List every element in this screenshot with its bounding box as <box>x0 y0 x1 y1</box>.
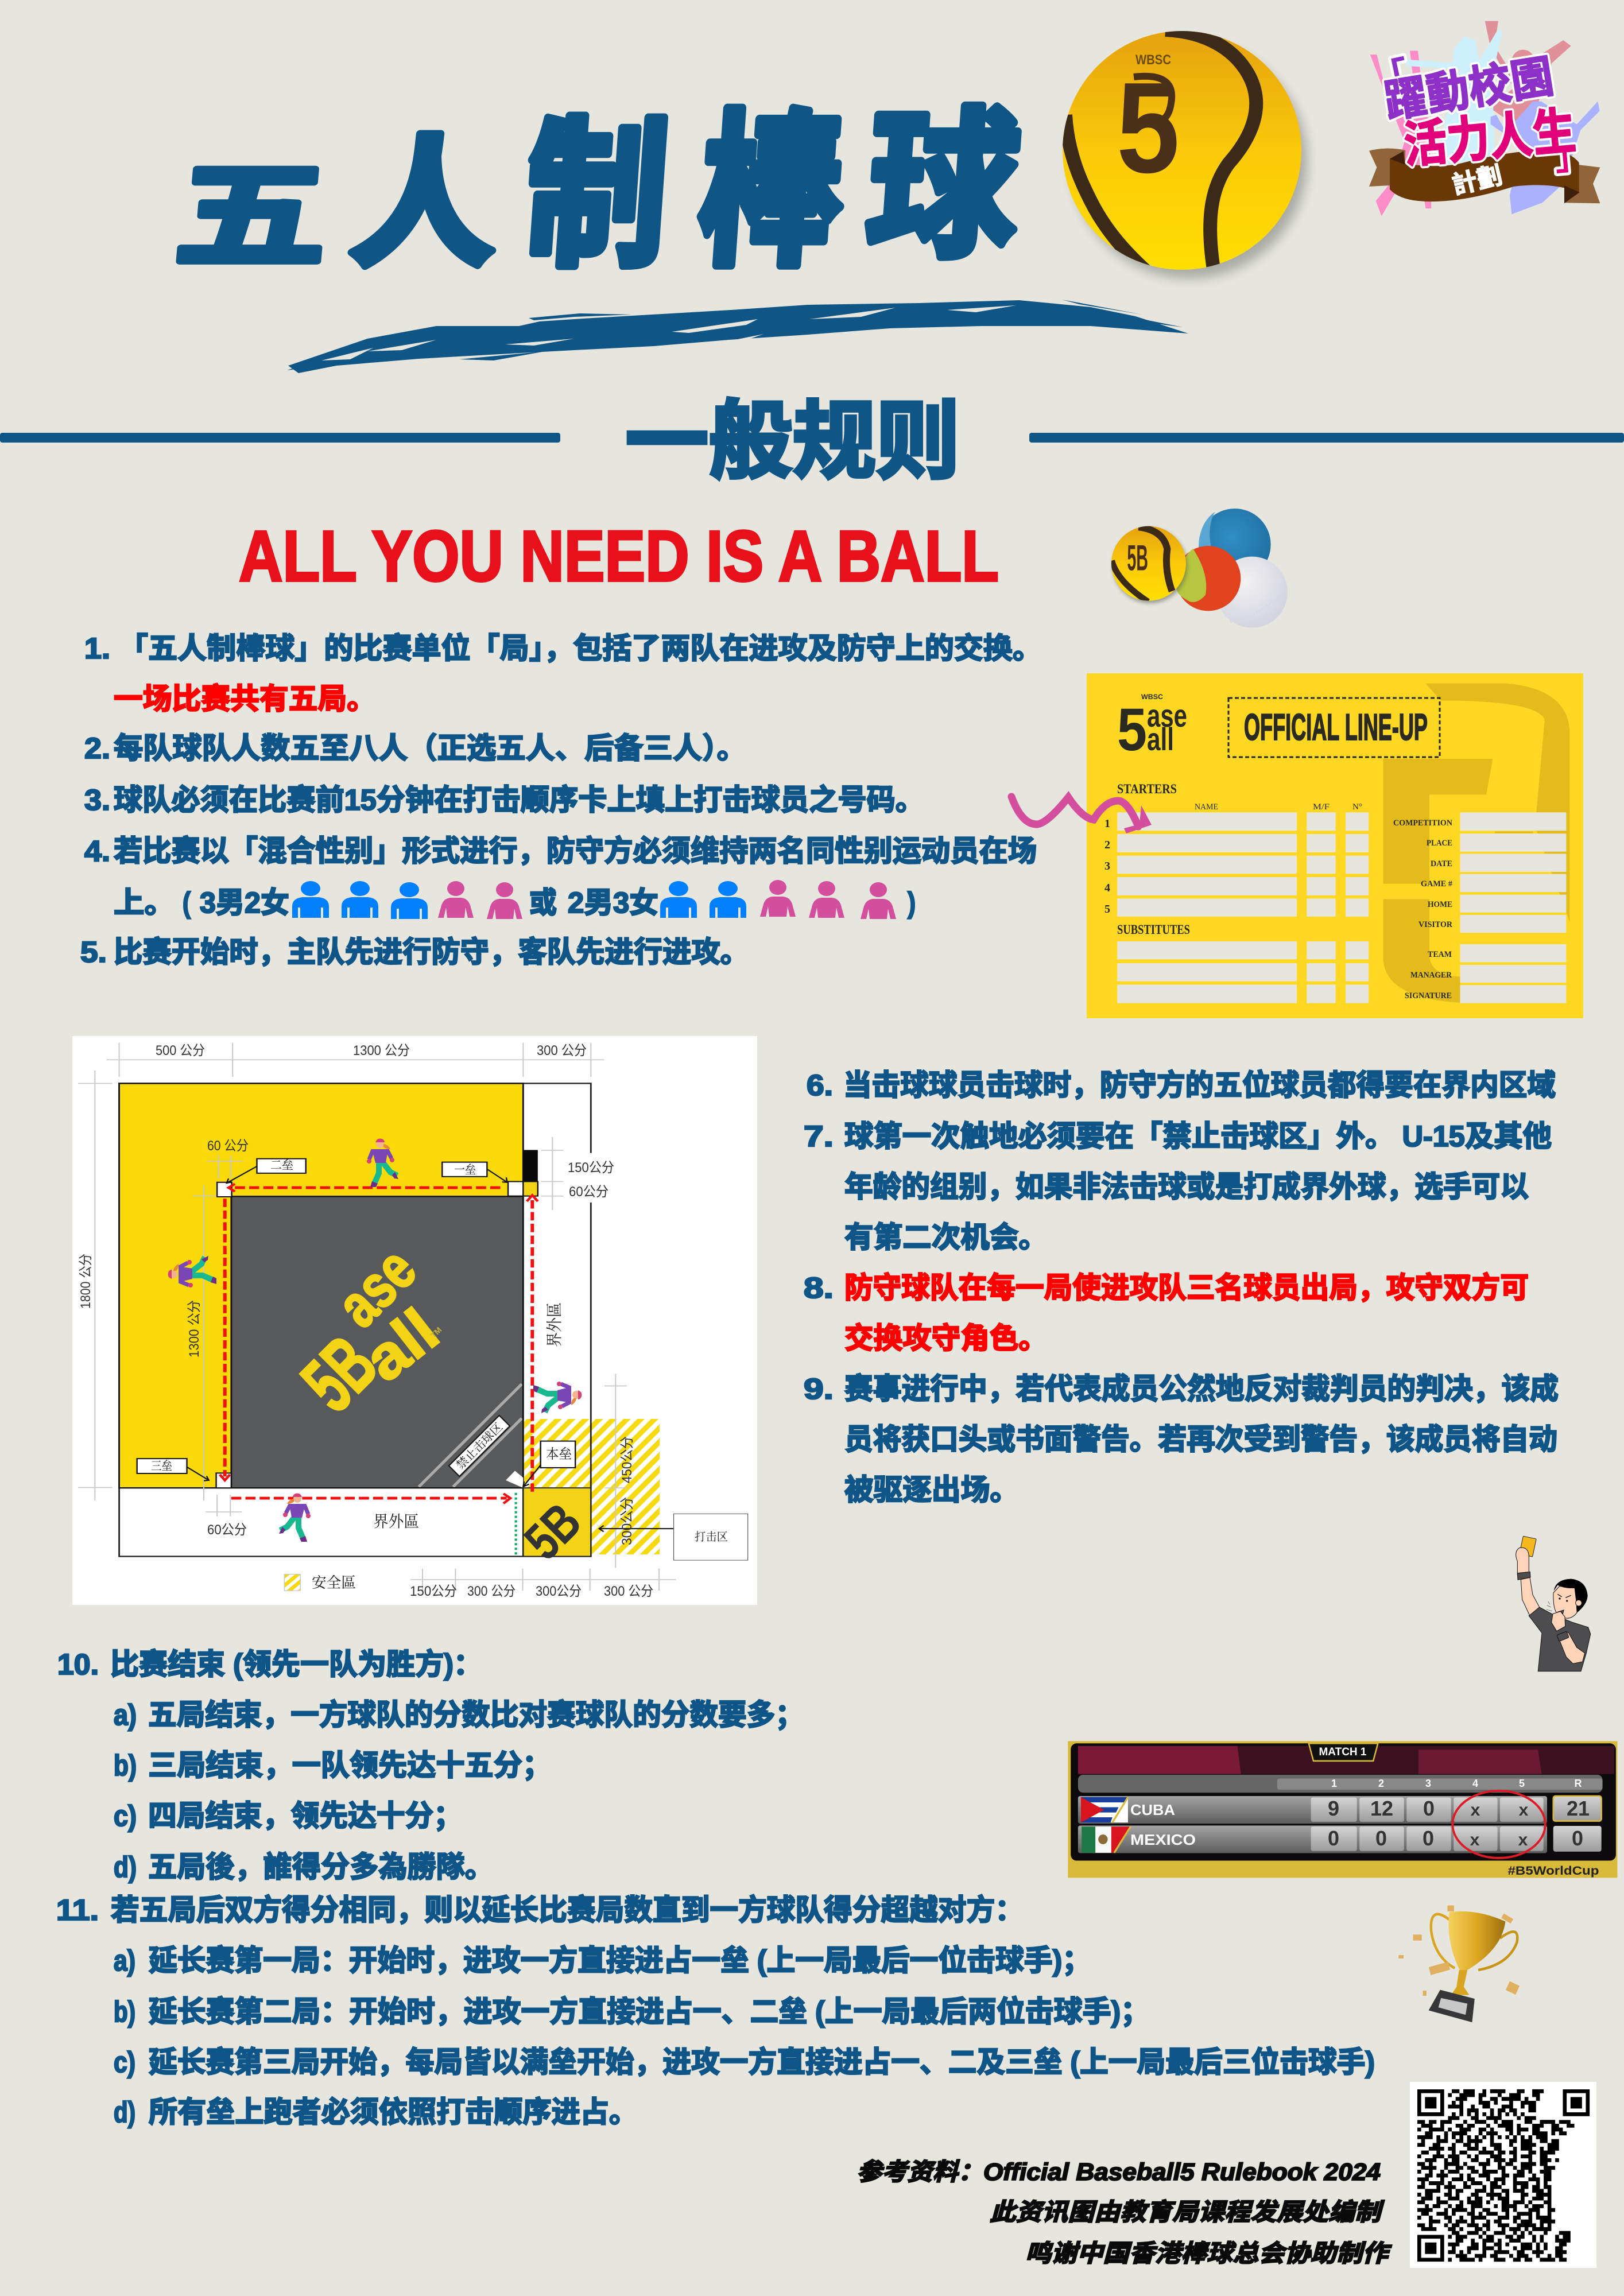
dimension labels: 1300 公分 <box>353 1043 410 1058</box>
section heading: 一般规则 <box>0 393 1624 490</box>
rule 11: 所有垒上跑者必须依照打击顺序进占。 <box>149 2096 638 2128</box>
scoreboard text: 0 <box>1423 1797 1435 1820</box>
panel: court diagram <box>72 1036 757 1605</box>
rule 10: 比赛结束 (领先一队为胜方)： <box>110 1648 482 1681</box>
no-hit zone label: 禁止击球区 <box>454 1420 505 1472</box>
scoreboard text: x <box>1519 1801 1529 1820</box>
rules 1 to 5: ) <box>908 886 916 919</box>
zone labels: 界外區 <box>373 1512 419 1531</box>
dimension labels: 300公分 <box>619 1497 635 1545</box>
rules 1 to 5: 1. <box>84 632 110 665</box>
panel: scoreboard photo <box>1068 1741 1617 1878</box>
rules 6 to 9: 赛事进行中，若代表成员公然地反对裁判员的判决，该成 <box>844 1372 1559 1405</box>
scoreboard text: x <box>1470 1830 1480 1849</box>
rule 10: b) <box>114 1749 137 1782</box>
rules 1 to 5: 上。 <box>114 886 175 919</box>
BaseBall5 court logo <box>285 1234 451 1428</box>
card logo: WBSC <box>1141 693 1163 701</box>
card logo: all <box>1147 721 1174 757</box>
rule 11: c) <box>114 2046 135 2078</box>
title: 人 <box>344 126 506 284</box>
rules 6 to 9: 当击球球员击球时，防守方的五位球员都得要在界内区域 <box>843 1069 1556 1102</box>
zone labels: 打击区 <box>695 1530 728 1543</box>
references / credits: 此资讯图由教育局课程发展处编制 <box>990 2198 1385 2225</box>
zone labels: 界外區 <box>545 1302 564 1347</box>
dimension labels: 60公分 <box>207 1522 247 1538</box>
flag: Mexico <box>1082 1826 1130 1853</box>
card labels: COMPETITION <box>1393 819 1452 828</box>
icon: four balls <box>1111 509 1288 628</box>
card labels <box>1104 782 1452 1000</box>
icon: main baseball5 ball <box>1063 30 1307 278</box>
scoreboard text: CUBA <box>1130 1801 1175 1818</box>
references / credits: 鸣谢中国香港棒球总会协助制作 <box>1025 2240 1393 2267</box>
rules 1 to 5: 3男2女 <box>200 886 289 919</box>
scoreboard text: MEXICO <box>1130 1831 1196 1848</box>
zone labels <box>151 1158 728 1591</box>
card labels: 2 <box>1104 839 1110 851</box>
rules 1 to 5: 若比赛以「混合性别」形式进行，防守方必须维持两名同性别运动员在场 <box>114 835 1037 867</box>
logo heading: 「 <box>1367 55 1413 104</box>
card labels: SUBSTITUTES <box>1117 922 1190 937</box>
scoreboard text: 12 <box>1370 1797 1393 1820</box>
scoreboard text: R <box>1574 1778 1582 1789</box>
rule 10 <box>57 1648 804 1883</box>
rules 6 to 9 <box>804 1069 1559 1506</box>
dimension labels: 60公分 <box>569 1184 608 1200</box>
scoreboard text: 2 <box>1378 1778 1384 1789</box>
ribbon <box>1369 149 1600 203</box>
dimension labels: 300 公分 <box>467 1584 516 1599</box>
rules 6 to 9: 8. <box>804 1271 834 1304</box>
rule 11: 11. <box>56 1894 99 1926</box>
rules 1 to 5: 一场比赛共有五局。 <box>114 682 376 715</box>
logo heading: 活力人生 <box>1402 103 1578 173</box>
rule 11: 若五局后双方得分相同，则以延长比赛局数直到一方球队得分超越对方： <box>111 1894 1024 1926</box>
rules 1 to 5: ( <box>183 886 191 919</box>
logo heading: 躍動校園 <box>1381 51 1557 127</box>
logo subtitle: 計劃 <box>1449 161 1505 200</box>
dimension labels: 150公分 <box>410 1584 457 1599</box>
rule 11: d) <box>114 2096 135 2128</box>
card labels: 4 <box>1104 882 1110 894</box>
card labels: DATE <box>1431 859 1452 868</box>
running paths <box>220 1184 538 1554</box>
icon: main baseball5 ball: WBSC <box>1135 52 1171 68</box>
dimension labels: 150公分 <box>568 1160 614 1176</box>
references / credits: 参考资料：Official Baseball5 Rulebook 2024 <box>856 2158 1381 2185</box>
logo heading: 活力人生 <box>1402 103 1578 173</box>
rules 1 to 5: 「五人制棒球」的比赛单位「局」，包括了两队在进攻及防守上的交换。 <box>119 632 1042 665</box>
rule 10: a) <box>114 1698 137 1731</box>
scoreboard text: 1 <box>1331 1778 1337 1789</box>
zone labels: 安全區 <box>312 1574 356 1591</box>
card labels: 5 <box>1104 903 1110 916</box>
title: 棒 <box>692 99 850 286</box>
rules 1 to 5: 3. <box>84 784 110 816</box>
card labels: TEAM <box>1428 950 1452 959</box>
QR code <box>1410 2082 1596 2268</box>
dimension labels <box>78 1043 653 1599</box>
rules 6 to 9: 球第一次触地必须要在「禁止击球区」外。 U-15及其他 <box>844 1120 1552 1153</box>
card logo: ase <box>1147 697 1187 734</box>
rule 10: 10. <box>57 1648 99 1681</box>
card labels: HOME <box>1428 900 1452 909</box>
scoreboard text: 0 <box>1423 1826 1434 1850</box>
scoreboard text: x <box>1471 1801 1480 1820</box>
rules 6 to 9: 7. <box>804 1120 834 1153</box>
scoreboard text: 0 <box>1328 1826 1339 1850</box>
no-hit zone label <box>449 1415 510 1476</box>
card labels: STARTERS <box>1117 782 1177 796</box>
runners <box>168 1139 582 1542</box>
dimension labels: 1300 公分 <box>187 1300 202 1358</box>
scoreboard text <box>1130 1746 1599 1878</box>
card labels: GAME # <box>1421 879 1452 889</box>
rules 1 to 5: 2男3女 <box>568 886 658 919</box>
dimension labels: 450公分 <box>619 1436 635 1483</box>
rules 6 to 9: 防守球队在每一局使进攻队三名球员出局，攻守双方可 <box>844 1271 1529 1304</box>
dimension labels: 300 公分 <box>537 1043 587 1058</box>
references / credits <box>856 2158 1393 2267</box>
title <box>170 97 1025 286</box>
scoreboard text: 0 <box>1375 1826 1387 1850</box>
card labels: VISITOR <box>1418 920 1452 929</box>
rule 10: 四局结束，领先达十分； <box>148 1799 462 1832</box>
card logo: 5 <box>1117 696 1147 763</box>
rules 6 to 9: 年龄的组别，如果非法击球或是打成界外球，选手可以 <box>844 1170 1529 1203</box>
score cells <box>1311 1796 1602 1852</box>
rules 1 to 5: 5. <box>80 936 107 968</box>
dimension labels: 500 公分 <box>156 1043 205 1058</box>
icon: trophy <box>1398 1906 1520 2022</box>
BaseBall5 court logo: all <box>351 1295 451 1394</box>
card labels: PLACE <box>1427 839 1452 848</box>
title: 制 <box>520 106 674 285</box>
card labels: MANAGER <box>1410 971 1452 980</box>
scoreboard text: 4 <box>1472 1778 1478 1789</box>
dimension labels: 300公分 <box>536 1584 582 1599</box>
rules 1 to 5: 2. <box>84 732 110 765</box>
rules 6 to 9: 员将获口头或书面警告。若再次受到警告，该成员将自动 <box>844 1423 1557 1456</box>
card labels: SIGNATURE <box>1405 991 1452 1000</box>
rule 11: 延长赛第二局：开始时，进攻一方直接进占一、二垒 (上一局最后两位击球手)； <box>149 1995 1149 2028</box>
safety zones <box>523 1419 660 1554</box>
card title: OFFICIAL LINE-UP <box>1244 706 1428 748</box>
rule 10: c) <box>114 1799 137 1832</box>
card labels: NAME <box>1195 802 1218 812</box>
logo heading <box>1367 51 1591 178</box>
card labels: N° <box>1352 802 1362 812</box>
card logo <box>1117 693 1187 763</box>
slogan: ALL YOU NEED IS A BALL <box>239 517 999 596</box>
zone labels: 一垒 <box>454 1163 476 1177</box>
rules 6 to 9: 9. <box>804 1372 834 1405</box>
dimension lines <box>78 1042 676 1591</box>
logo heading: 」 <box>1553 137 1591 178</box>
flag: Cuba <box>1081 1797 1128 1822</box>
rules 1 to 5: 球队必须在比赛前15分钟在打击顺序卡上填上打击球员之号码。 <box>114 784 924 816</box>
card labels: 1 <box>1104 817 1110 830</box>
rules 6 to 9: 有第二次机会。 <box>844 1221 1048 1254</box>
zone labels: 三垒 <box>151 1459 172 1473</box>
title: 球 <box>862 97 1025 277</box>
scoreboard text: 3 <box>1425 1778 1431 1789</box>
dimension labels: 60 公分 <box>207 1138 249 1154</box>
scoreboard text: 5 <box>1519 1778 1525 1789</box>
base label boxes <box>137 1159 748 1560</box>
rule 11: b) <box>114 1995 135 2028</box>
scoreboard text: 9 <box>1328 1797 1339 1820</box>
rule 10: 三局结束，一队领先达十五分； <box>148 1749 551 1782</box>
rules 6 to 9: 6. <box>807 1069 833 1102</box>
yellow card <box>1520 1536 1536 1557</box>
rules 6 to 9: 被驱逐出场。 <box>844 1473 1019 1506</box>
rule 11 <box>56 1894 1375 2128</box>
rules 1 to 5: 每队球队人数五至八人（正选五人、后备三人）。 <box>114 732 746 765</box>
section heading: 一般规则: 一般规则 <box>625 393 960 490</box>
rules 1 to 5: 比赛开始时，主队先进行防守，客队先进行进攻。 <box>114 936 749 968</box>
rules 1 to 5 <box>80 632 1042 968</box>
icon: 2 men 3 women <box>660 880 896 919</box>
cells <box>1117 812 1566 1003</box>
BaseBall5 court logo: 5B <box>285 1319 394 1428</box>
arrow: pink squiggle to card <box>1011 797 1152 833</box>
scoreboard text: x <box>1518 1830 1528 1849</box>
card labels: 3 <box>1104 860 1110 872</box>
icon: main baseball5 ball: 5 <box>1117 55 1180 200</box>
rule 11: 延长赛第三局开始，每局皆以满垒开始，进攻一方直接进占一、二及三垒 (上一局最后三位击球手) <box>149 2046 1375 2078</box>
brush stroke decoration <box>287 300 1188 373</box>
rule 10: 五局结束，一方球队的分数比对赛球队的分数要多； <box>148 1698 804 1731</box>
card labels: M/F <box>1313 802 1330 812</box>
title: 五 <box>170 152 334 282</box>
icon: referee <box>1516 1536 1591 1671</box>
icon: four balls: 5B <box>1127 538 1148 578</box>
rule 10: d) <box>114 1851 137 1883</box>
scoreboard text: MATCH 1 <box>1319 1746 1367 1758</box>
watermark <box>1383 684 1569 1003</box>
rule 11: 延长赛第一局：开始时，进攻一方直接进占一垒 (上一局最后一位击球手)； <box>149 1944 1091 1977</box>
logo: 躍動校園活力人生計劃 <box>1367 21 1600 216</box>
rules 6 to 9: 交换攻守角色。 <box>844 1322 1048 1355</box>
zone labels: 二垒 <box>270 1158 293 1172</box>
rules 1 to 5: 4. <box>84 835 110 867</box>
zone labels: 本垒 <box>546 1446 572 1462</box>
dimension labels: 1800 公分 <box>78 1254 94 1309</box>
rule 11: a) <box>114 1944 135 1977</box>
court shapes <box>119 1083 617 1591</box>
scoreboard text: 21 <box>1567 1797 1590 1820</box>
silhouettes <box>1370 21 1600 216</box>
card title <box>1228 698 1440 757</box>
BaseBall5 court logo: ase <box>323 1234 429 1340</box>
scoreboard text: #B5WorldCup <box>1507 1864 1599 1878</box>
rules 1 to 5: 或 <box>529 886 557 919</box>
pointer arrows <box>187 1166 674 1531</box>
logo heading: 躍動校園 <box>1381 51 1557 127</box>
batter box logo: 5B <box>513 1492 592 1571</box>
scoreboard text: 0 <box>1572 1826 1583 1850</box>
rule 10: 五局後，誰得分多為勝隊。 <box>148 1851 494 1883</box>
panel: official line-up card <box>1087 673 1583 1018</box>
dimension labels: 300 公分 <box>604 1584 653 1599</box>
icon: 3 men 2 women <box>292 881 522 919</box>
BaseBall5 court logo: TM <box>429 1325 443 1340</box>
